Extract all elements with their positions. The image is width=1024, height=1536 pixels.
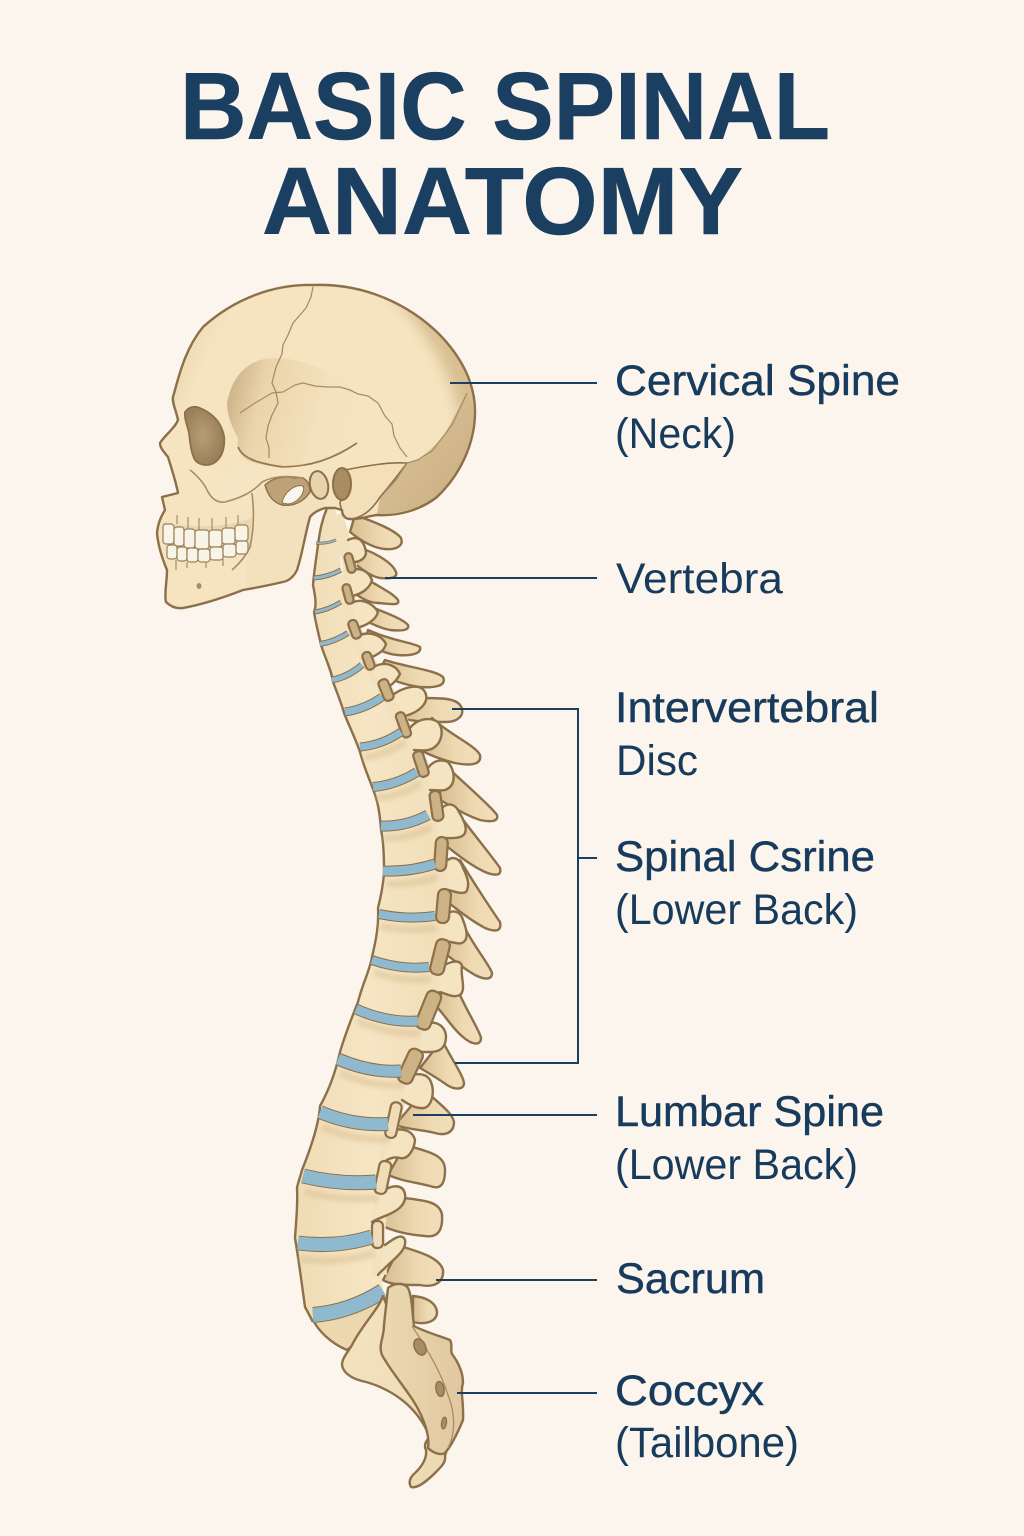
infographic: basic spinal anatomy [156,72,898,1488]
zygomatic opening [282,486,304,504]
jaw condyle [307,469,331,501]
teeth [162,493,253,570]
facet joint slits [342,552,451,1248]
spine illustration [295,508,500,1487]
label: intervertebral disc: Intervertebral [615,684,879,732]
articular lobes [348,538,468,1275]
skull base fill [157,285,475,608]
mandibular notch [265,477,310,505]
label: intervertebral disc [615,684,879,785]
title [180,53,830,255]
label: coccyx: Coccyx [615,1367,765,1415]
bracket connector [452,709,597,1063]
skull [157,285,490,608]
title: ANATOMY [262,148,743,255]
sacrum and coccyx [342,1284,463,1487]
vertebral column bodies [295,508,443,1322]
sacrum rear wedge [313,1296,384,1350]
label: lumbar spine [413,1088,884,1189]
skull sutures [240,287,467,492]
label: spinal csrine: (Lower Back) [615,886,858,934]
label: coccyx [457,1367,799,1467]
zygomatic arch [190,462,335,502]
label: cervical spine: Cervical Spine [615,357,900,405]
label: lumbar spine: Lumbar Spine [615,1088,884,1136]
ear opening [333,468,351,500]
label: spinal csrine: Spinal Csrine [615,833,875,881]
cranium soft shading [175,302,474,417]
label: coccyx: (Tailbone) [615,1419,799,1467]
intervertebral discs [298,540,435,1315]
body shading below discs [300,742,438,1261]
cheekbone arch edge [238,443,357,467]
title: BASIC SPINAL [180,53,830,160]
eye socket [185,407,224,465]
label: cervical spine: (Neck) [615,410,736,458]
label: sacrum: Sacrum [616,1255,765,1303]
spinous processes [348,515,500,1323]
mental foramen [196,583,202,589]
mandible ramus [245,475,330,588]
label: lumbar spine: (Lower Back) [615,1141,858,1189]
label: vertebra: Vertebra [616,555,783,603]
occipital shading [377,393,474,514]
mastoid process [340,463,407,519]
skull outline [157,285,475,608]
label: cervical spine [450,357,900,458]
label: intervertebral disc: Disc [616,737,698,785]
label: spinal csrine [615,833,875,934]
temporal fossa [227,358,365,467]
